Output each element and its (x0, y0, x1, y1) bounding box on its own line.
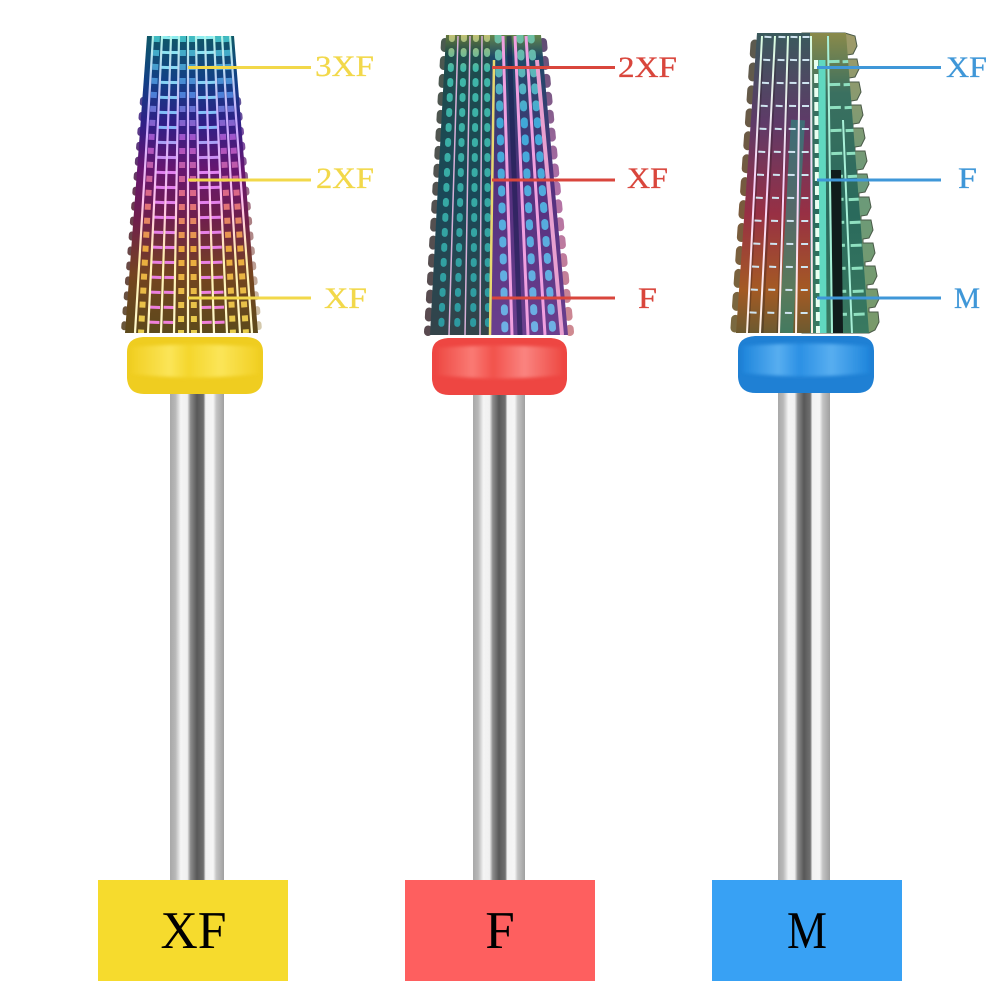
grade label: XF: XF (324, 282, 367, 315)
carbide cone with coarse teeth (735, 33, 879, 333)
grade label: F: F (958, 162, 977, 195)
grade label: 2XF: 2XF (618, 51, 677, 84)
grit tag: F: F (485, 902, 515, 960)
grit tag: F (405, 880, 595, 981)
shaft (778, 393, 830, 880)
grit tag: M (712, 880, 902, 981)
grade label: XF: XF (946, 51, 987, 84)
carbide cone with fine teeth (124, 36, 259, 333)
nail drill bit: M (blue) (712, 33, 987, 981)
grade label: F: F (638, 282, 657, 315)
yellow collar (127, 337, 263, 394)
grit tag: XF (98, 880, 288, 981)
grade label: 3XF: 3XF (315, 50, 374, 83)
blue collar (738, 336, 874, 393)
grit tag: XF: XF (160, 902, 226, 960)
shaft (473, 394, 525, 880)
nail drill bit: F (red) (405, 35, 677, 981)
grade label: M: M (954, 282, 980, 315)
grade label: XF: XF (627, 162, 668, 195)
shaft (170, 394, 224, 880)
carbide cone with medium teeth (428, 35, 570, 335)
grade label: 2XF: 2XF (316, 162, 374, 195)
red collar (432, 338, 567, 395)
nail drill bit: XF (yellow) (98, 36, 374, 981)
grit tag: M: M (787, 902, 827, 960)
